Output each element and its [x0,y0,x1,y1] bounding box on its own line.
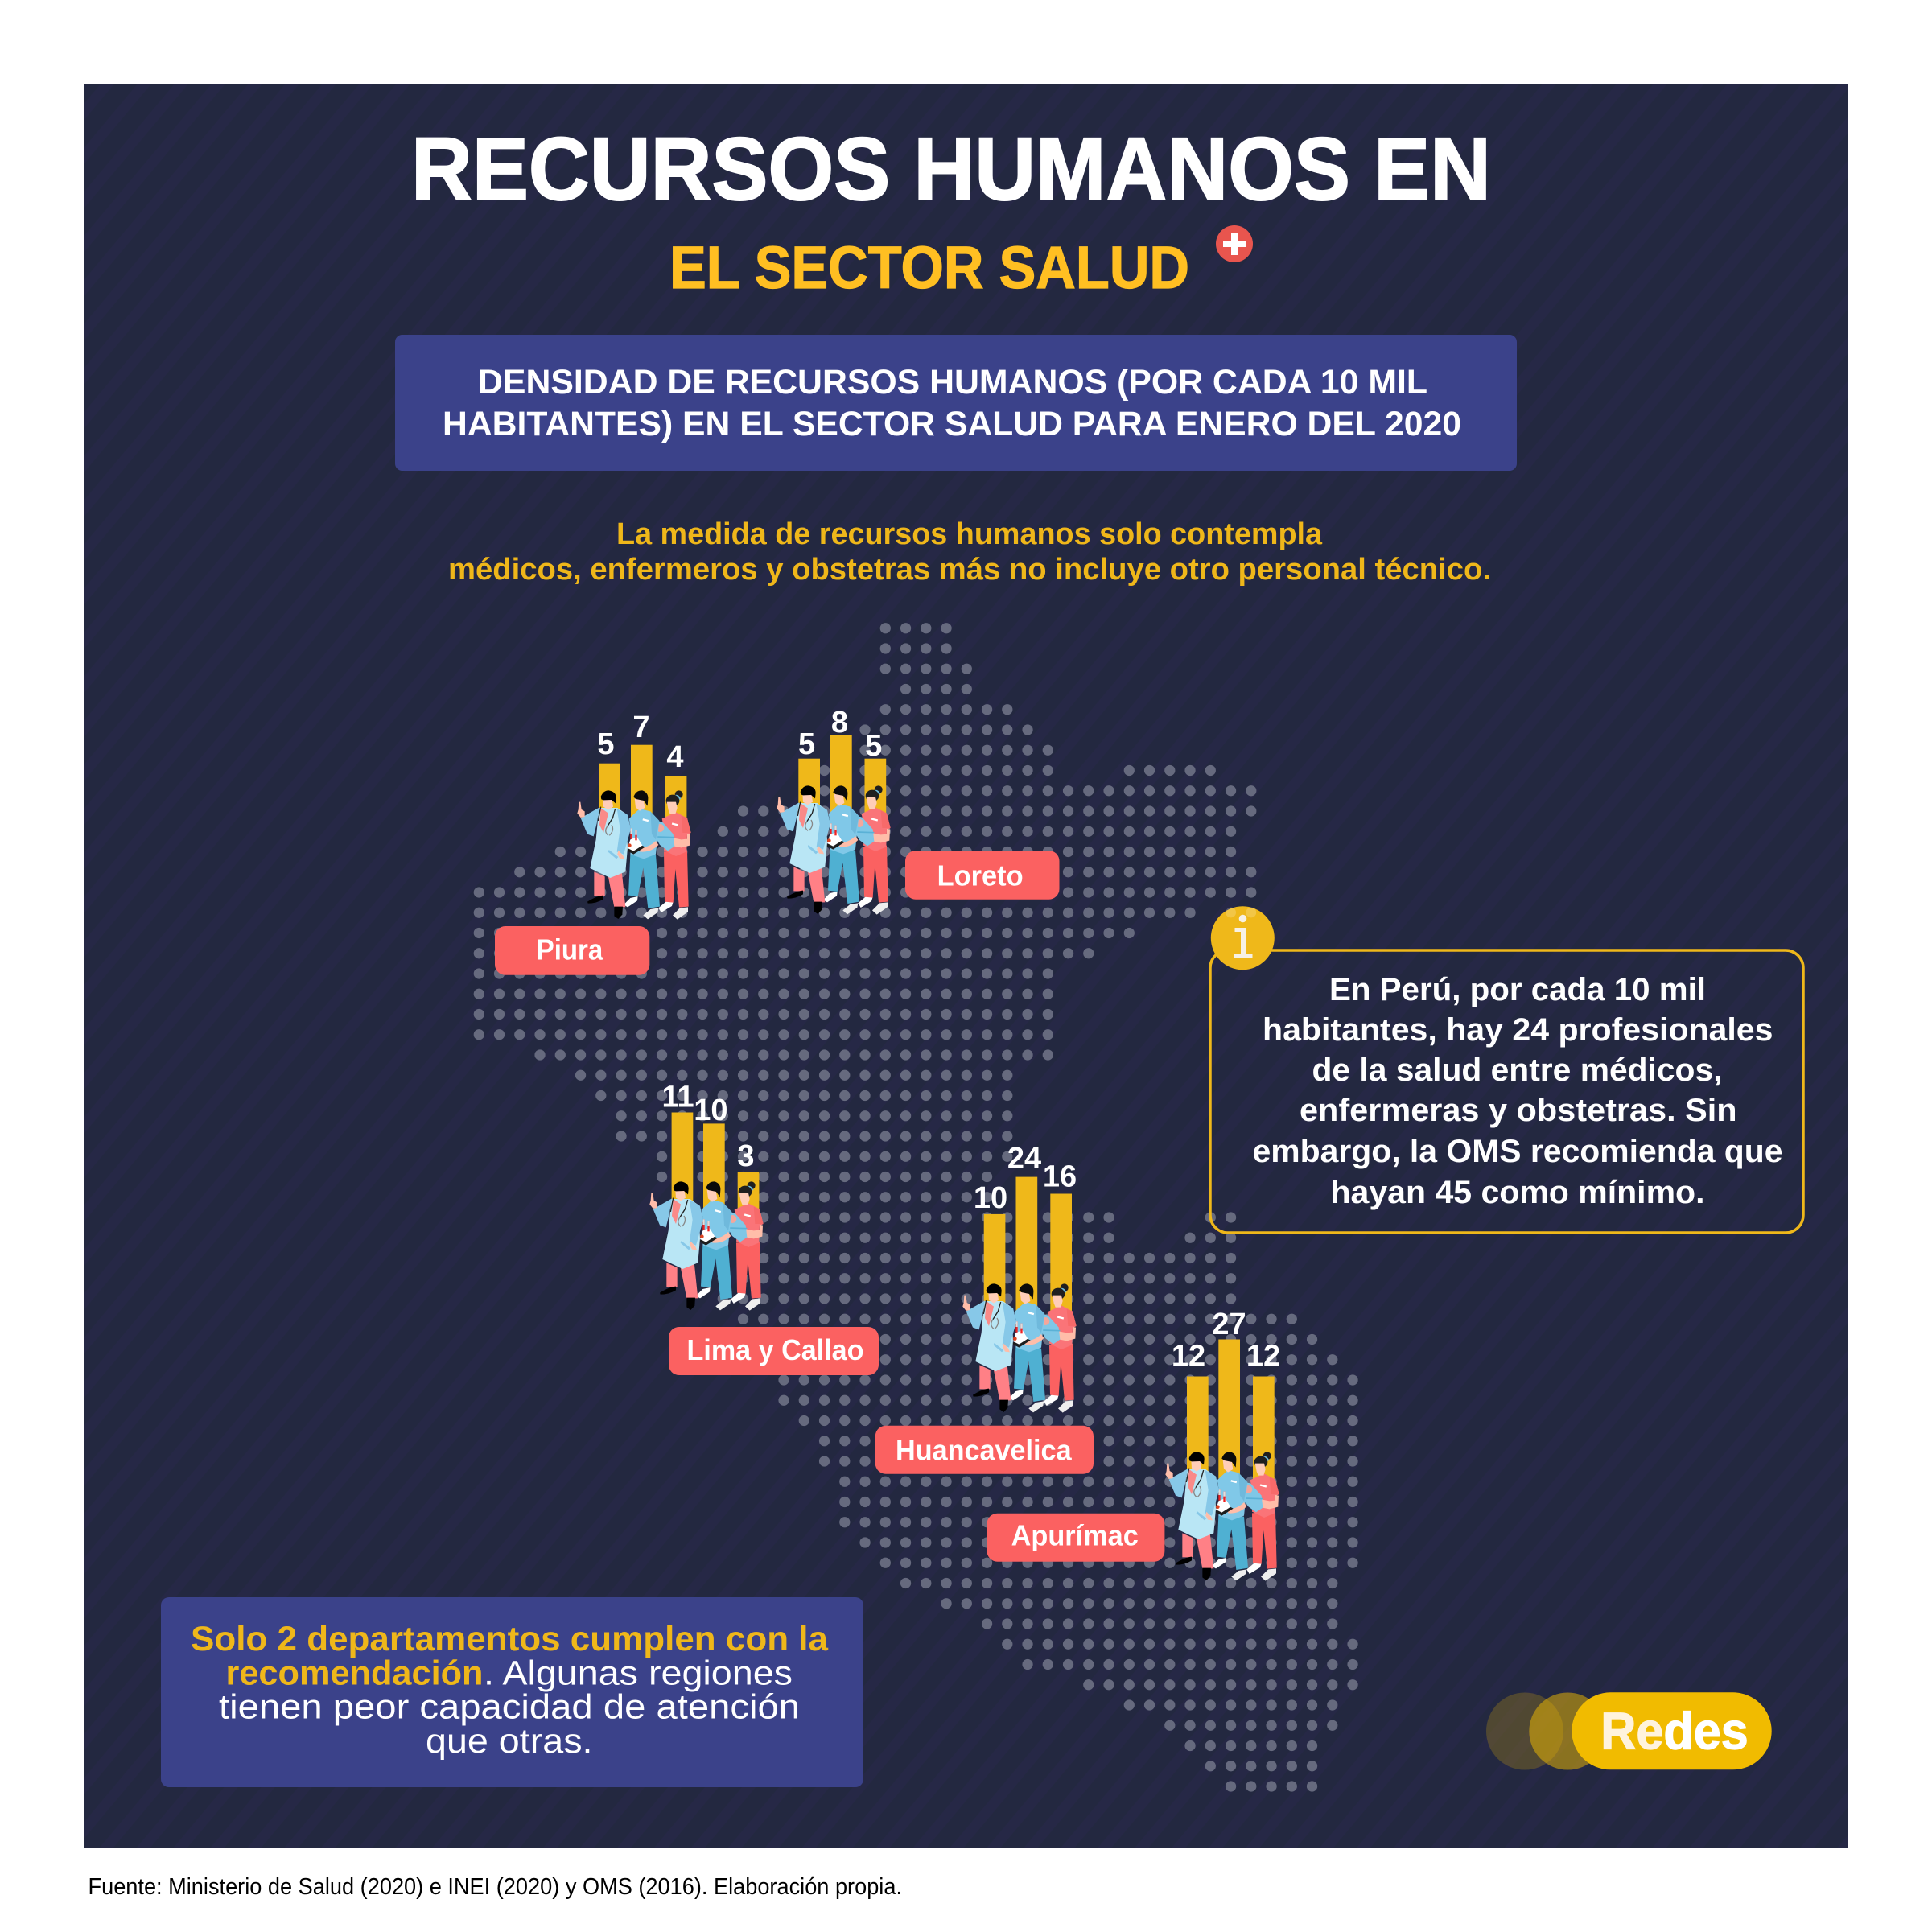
panel: conclusion: que otras. [426,1722,592,1761]
label: Apurímac: Apurímac [1011,1518,1139,1551]
callout: WHO recommendation [1210,950,1803,1233]
callout: WHO recommendation: habitantes, hay 24 profesionales [1263,1012,1773,1048]
panel: chart heading: DENSIDAD DE RECURSOS HUMANOS (POR CADA 10 MIL [478,363,1427,402]
label: Loreto [905,851,1059,900]
dot map of Peru [479,628,1353,1786]
label: Apurímac [987,1514,1164,1562]
chart: Piura [577,711,691,920]
chart: Huancavelica: 10 [974,1181,1007,1215]
text block: note on the measure: médicos, enfermeros y obstetras más no incluye otro personal técnico. [448,553,1491,587]
callout: WHO recommendation: enfermeras y obstetras. Sin [1300,1093,1737,1128]
subtitle: el sector salud: EL SECTOR SALUD [669,234,1189,301]
chart: Lima y Callao: 11 [662,1080,694,1114]
panel: chart heading: HABITANTES) EN EL SECTOR SALUD PARA ENERO DEL 2020 [443,405,1461,443]
callout: WHO recommendation: hayan 45 como mínimo. [1331,1175,1704,1210]
chart: Huancavelica [962,1142,1077,1413]
chart: Apurímac: 27 [1212,1308,1246,1341]
chart: Loreto [777,706,891,915]
callout: WHO recommendation: embargo, la OMS recomienda que [1252,1134,1783,1169]
label: Lima y Callao [669,1327,879,1375]
label: Loreto: Loreto [937,859,1024,892]
label: Piura: Piura [537,933,603,966]
panel: conclusion: recomendación [225,1654,483,1692]
panel: conclusion: tienen peor capacidad de atención [219,1688,800,1727]
logo: Redes: Redes [1600,1701,1749,1760]
source note: Fuente: Ministerio de Salud (2020) e INEI (2020) y OMS (2016). Elaboración propia. [89,1874,902,1900]
chart: Piura: 5 [597,727,615,761]
chart: Lima y Callao: 10 [694,1094,728,1127]
panel: chart heading [395,335,1517,471]
chart: Loreto: 5 [865,729,882,763]
callout: WHO recommendation: de la salud entre médicos, [1312,1053,1722,1088]
chart: Loreto: 5 [798,727,815,761]
chart: Huancavelica: 16 [1043,1160,1077,1194]
icon: info [1211,906,1275,970]
panel: conclusion: . Algunas regiones [484,1654,793,1692]
chart: Apurímac [1165,1308,1280,1581]
title: recursos humanos en: RECURSOS HUMANOS EN [411,120,1491,219]
label: Huancavelica [875,1426,1094,1474]
logo: Redes [1486,1692,1772,1770]
panel: conclusion: Solo 2 departamentos cumplen con la [191,1620,829,1658]
text block: note on the measure [448,517,1491,587]
label: Huancavelica: Huancavelica [896,1433,1073,1466]
text block: note on the measure: La medida de recursos humanos solo contempla [616,517,1323,551]
label: Piura [495,926,649,975]
icon: medical cross [1216,225,1253,262]
chart: Lima y Callao [649,1080,764,1311]
panel: conclusion [161,1597,863,1787]
callout: WHO recommendation: En Perú, por cada 10 mil [1329,972,1706,1007]
chart: Piura: 7 [632,711,650,744]
chart: Piura: 4 [666,740,684,774]
label: Lima y Callao: Lima y Callao [687,1333,864,1366]
chart: Apurímac: 12 [1172,1340,1205,1374]
chart: Loreto: 8 [831,706,848,739]
chart: Lima y Callao: 3 [737,1139,755,1173]
chart: Apurímac: 12 [1246,1340,1280,1374]
chart: Huancavelica: 24 [1007,1142,1041,1176]
